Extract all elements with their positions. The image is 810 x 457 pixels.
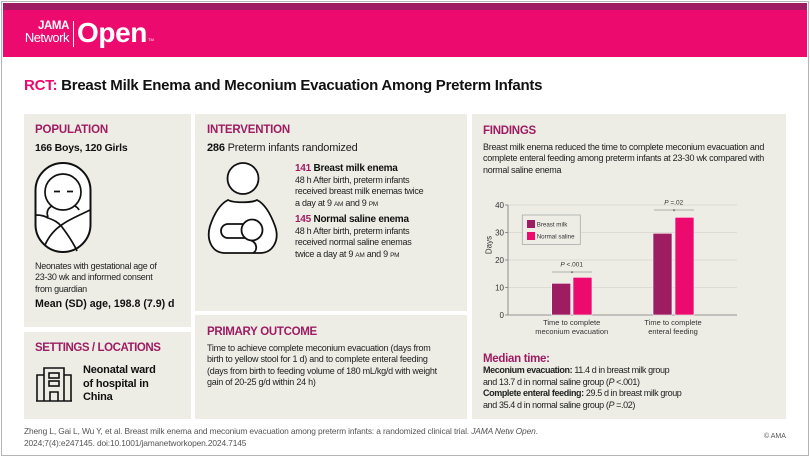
category labels: [535, 318, 702, 336]
findings summary: complete enteral feeding among preterm infants at 23-30 wk compared with: [483, 153, 764, 163]
median time text: and 13.7 d in normal saline group (P <.001): [483, 377, 640, 387]
legend: Breast milk: [537, 222, 568, 228]
settings text: China: [83, 391, 113, 403]
category labels: enteral feeding: [648, 327, 698, 336]
y axis ticks: [495, 201, 505, 320]
settings text: of hospital in: [83, 378, 149, 390]
primary outcome text: [207, 343, 438, 387]
journal logo: Open: [77, 17, 147, 48]
median time text: and 35.4 d in normal saline group (P =.02): [483, 400, 635, 410]
primary outcome heading: PRIMARY OUTCOME: [207, 326, 317, 338]
copyright: © AMA: [764, 433, 786, 440]
journal logo: TM: [148, 37, 154, 42]
p values: P =.02: [664, 200, 684, 206]
category labels: Time to complete: [543, 318, 600, 327]
median time text: Complete enteral feeding: 29.5 d in breast milk group: [483, 388, 681, 398]
category labels: meconium evacuation: [535, 327, 608, 336]
population heading: POPULATION: [35, 124, 108, 136]
header banner: [3, 3, 807, 57]
arm 1 text: received breast milk enemas twice: [295, 186, 423, 196]
panel: findings: [472, 114, 786, 419]
arm 2: normal saline: [295, 214, 412, 259]
citation: [24, 426, 538, 448]
bar chart: *: [673, 210, 676, 216]
population description: [35, 261, 157, 294]
population counts: 166 Boys, 120 Girls: [35, 142, 128, 154]
citation: Zheng L, Gai L, Wu Y, et al. Breast milk enema and meconium evacuation among preterm infants: a randomized clinical trial. JAMA Netw Open.: [24, 426, 538, 436]
settings text: Neonatal ward: [83, 364, 156, 376]
icon: parent holding infant: [208, 162, 278, 254]
arm 2 text: [295, 226, 412, 259]
p values: P <.001: [560, 262, 583, 268]
primary outcome text: birth to yellow stool for 1 d) and to complete enteral feeding: [207, 354, 428, 364]
arm 1: breast milk: [295, 163, 424, 208]
journal logo: JAMA: [38, 20, 69, 32]
y axis ticks: 30: [495, 228, 505, 238]
icon: hospital: [36, 367, 72, 402]
arm 1 text: a day at 9 AM and 9 PM: [295, 198, 378, 208]
median time heading: Median time:: [483, 353, 550, 365]
population description: from guardian: [35, 284, 87, 294]
title: RCT: Breast Milk Enema and Meconium Evacuation Among Preterm Infants: [24, 77, 542, 94]
panel: settings: [24, 332, 191, 419]
findings summary: Breast milk enema reduced the time to complete meconium evacuation and: [483, 142, 764, 152]
y axis ticks: 10: [495, 284, 505, 292]
population description: Neonates with gestational age of: [35, 261, 157, 271]
median time text: [483, 365, 682, 410]
randomized count: 286 Preterm infants randomized: [207, 142, 358, 154]
bar chart: *: [571, 272, 574, 278]
journal logo: [25, 17, 154, 48]
journal logo: Network: [25, 30, 69, 45]
mean age: Mean (SD) age, 198.8 (7.9) d: [35, 298, 175, 310]
y axis ticks: 0: [500, 311, 505, 320]
intervention heading: INTERVENTION: [207, 124, 290, 136]
arm 2 text: twice a day at 9 AM and 9 PM: [295, 249, 399, 259]
settings heading: SETTINGS / LOCATIONS: [35, 342, 161, 354]
bars: [552, 217, 694, 315]
findings summary: [483, 142, 764, 175]
arm 2 text: 48 h After birth, preterm infants: [295, 226, 409, 236]
panel: primary outcome: [195, 315, 467, 419]
primary outcome text: (days from birth to feeding volume of 180 mL/kg/d with weight: [207, 366, 437, 376]
y axis ticks: 40: [495, 201, 505, 210]
arm 1 text: [295, 175, 424, 208]
settings text: [83, 364, 156, 403]
findings heading: FINDINGS: [483, 125, 536, 137]
legend: Normal saline: [537, 234, 575, 240]
primary outcome text: gain of 20-25 g/d within 24 h): [207, 377, 316, 387]
panel: intervention: [195, 114, 467, 311]
findings summary: normal saline enema: [483, 165, 561, 175]
median time text: Meconium evacuation: 11.4 d in breast milk group: [483, 365, 669, 375]
y axis ticks: 20: [495, 256, 505, 265]
arm 1 title: 141 Breast milk enema: [295, 163, 398, 174]
category labels: Time to complete: [644, 318, 702, 327]
p values: [560, 200, 684, 268]
population description: 23-30 wk and informed consent: [35, 272, 152, 282]
bar chart: [484, 200, 737, 336]
arm 2 text: received normal saline enemas: [295, 237, 411, 247]
legend: [522, 215, 580, 244]
citation: 2024;7(4):e247145. doi:10.1001/jamanetworkopen.2024.7145: [24, 438, 246, 448]
icon: swaddled baby: [34, 162, 92, 253]
arm 2 title: 145 Normal saline enema: [295, 214, 409, 225]
y axis label: Days: [484, 236, 494, 254]
arm 1 text: 48 h After birth, preterm infants: [295, 175, 409, 185]
primary outcome text: Time to achieve complete meconium evacuation (days from: [207, 343, 431, 353]
panel: population: [24, 114, 191, 327]
